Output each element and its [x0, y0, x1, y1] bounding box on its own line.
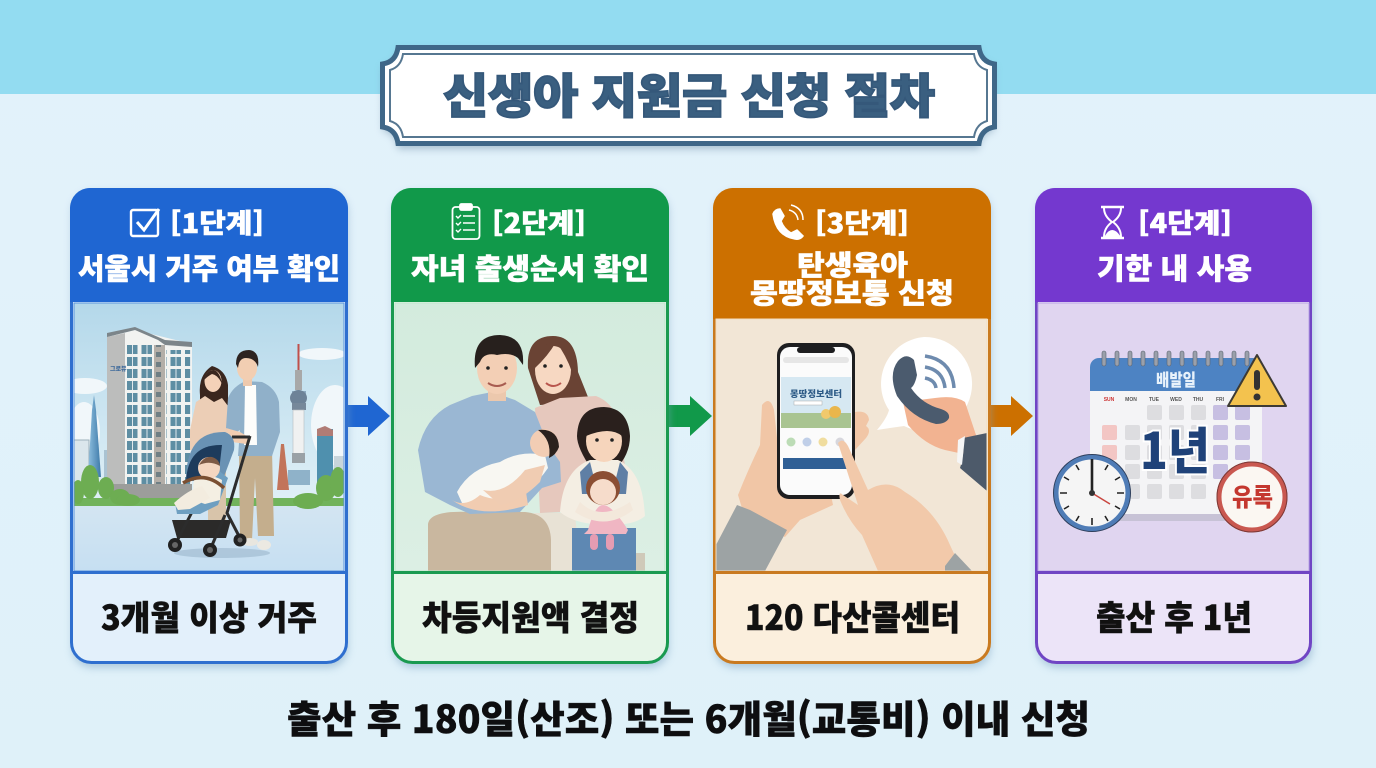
small buildings left	[74, 440, 90, 482]
stamp badge: 유록	[1232, 478, 1273, 514]
step 1 caption: 3개월 이상 거주	[101, 591, 317, 640]
illustration: family in Seoul city	[63, 303, 359, 571]
step 3 caption: 120 다산콜센터	[745, 591, 960, 640]
pointing hand	[838, 441, 972, 571]
step 2 header	[391, 188, 669, 302]
image frame step 3	[716, 319, 987, 571]
title text: 신생아 지원금 신청 절차	[443, 58, 935, 127]
speech bubble	[877, 337, 972, 431]
right building	[317, 429, 333, 485]
trees and lawn	[74, 498, 344, 506]
holding hand	[716, 401, 869, 571]
arrow: step 3 to 4	[991, 396, 1033, 436]
step 1 label: [1단계]	[170, 202, 264, 241]
man	[226, 350, 280, 550]
illustration: family with newborn and daughter	[395, 303, 665, 571]
divider step 2	[391, 571, 669, 574]
step 4 caption: 출산 후 1년	[1096, 591, 1252, 640]
calendar	[1090, 351, 1262, 521]
icon: checkbox	[131, 209, 159, 236]
step 3 title line 2: 몽땅정보통 신청	[750, 272, 954, 312]
one year label: 1년	[1140, 412, 1210, 484]
title plaque	[382, 48, 994, 149]
step 3 header	[713, 188, 991, 319]
step 2 label: [2단계]	[492, 202, 586, 241]
smartphone: 몽땅정보센터	[790, 387, 842, 400]
step 4 title: 기한 내 사용	[1097, 246, 1252, 288]
calendar: 배발일	[1156, 366, 1196, 391]
illustration: calendar with clock	[1038, 303, 1309, 571]
panel: step 1	[63, 188, 359, 668]
divider step 3	[713, 571, 991, 574]
top colour band	[0, 0, 1376, 94]
illustration: phone and call	[716, 319, 987, 571]
step 3 label: [3단계]	[815, 202, 909, 241]
panel: step 3	[713, 188, 991, 668]
apartment tower: 그로뷰	[110, 364, 127, 373]
calendar: SUN	[1104, 397, 1115, 403]
step 2 caption: 차등지원액 결정	[422, 591, 639, 640]
woman	[190, 366, 228, 535]
N Seoul tower	[288, 344, 310, 485]
calendar: MON	[1125, 397, 1137, 403]
receiver and waves	[893, 356, 954, 424]
calendar: TUE	[1149, 397, 1160, 403]
smartphone	[777, 343, 855, 499]
stamp badge	[1217, 462, 1287, 532]
arrow: step 1 to 2	[348, 396, 390, 436]
icon: hourglass	[1101, 207, 1124, 238]
image frame step 1	[74, 303, 344, 571]
caller hand and sleeve	[903, 397, 987, 491]
panel: step 4	[1035, 188, 1313, 668]
divider step 4	[1035, 571, 1312, 574]
image frame step 4	[1038, 303, 1309, 571]
mother	[528, 336, 626, 571]
divider step 1	[70, 571, 348, 574]
stroller with baby	[168, 432, 270, 558]
image frame step 2	[395, 303, 665, 571]
step 3 title line 1: 탄생육아	[797, 244, 908, 284]
warning triangle	[1228, 355, 1286, 406]
footer note: 출산 후 180일(산조) 또는 6개월(교통비) 이내 신청	[287, 689, 1090, 744]
step 1 title: 서울시 거주 여부 확인	[78, 246, 340, 288]
bench	[636, 553, 645, 570]
step 1 header	[70, 188, 348, 302]
step 4 header	[1035, 188, 1312, 302]
step 4 label: [4단계]	[1138, 202, 1232, 241]
father	[418, 335, 561, 571]
arrow: step 2 to 3	[669, 396, 712, 436]
clock	[1054, 454, 1130, 532]
icon: clipboard	[452, 204, 480, 239]
calendar: WED	[1170, 397, 1182, 403]
apartment tower	[107, 327, 192, 498]
icon: phone	[773, 205, 803, 239]
newborn	[452, 429, 559, 511]
daughter with doll	[560, 407, 645, 571]
panel: step 2	[391, 188, 669, 668]
calendar: FRI	[1216, 397, 1225, 403]
calendar: THU	[1193, 397, 1204, 403]
step 2 title: 자녀 출생순서 확인	[411, 246, 649, 288]
